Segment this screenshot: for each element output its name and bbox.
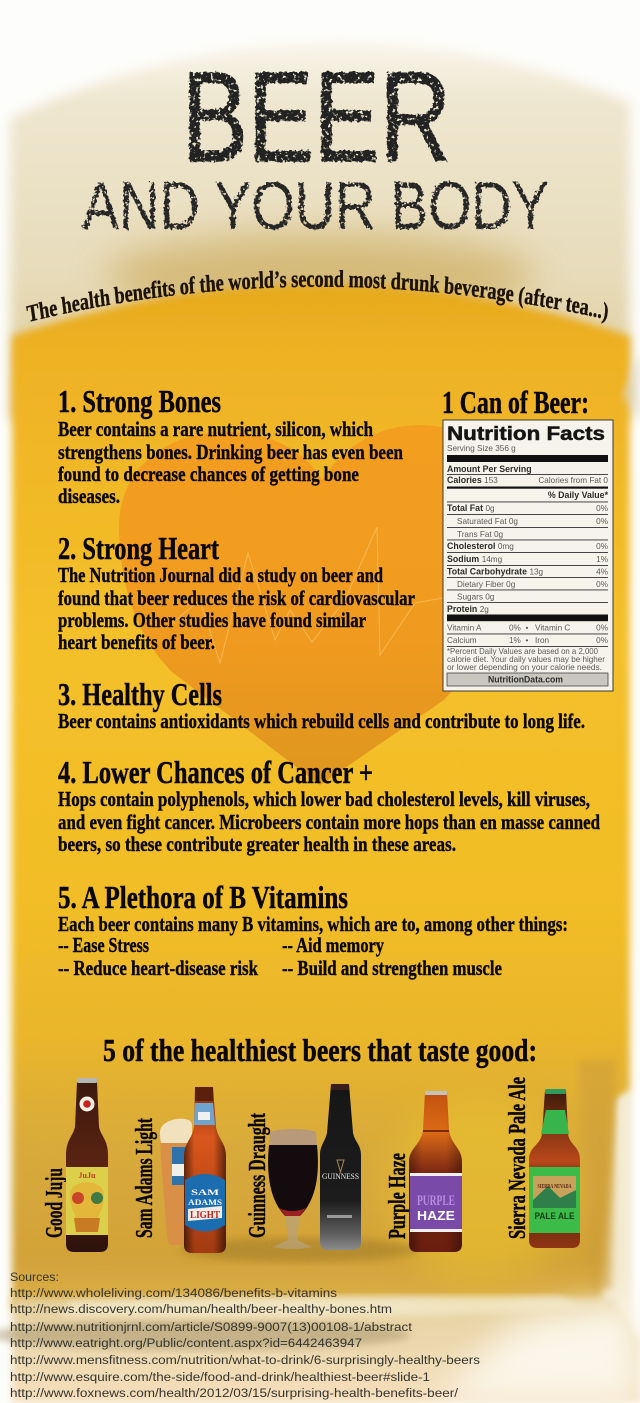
nutrition facts panel: 4%	[596, 568, 608, 576]
nutrition facts panel: 1%	[509, 636, 521, 645]
section 2: strong heart: The Nutrition Journal did a study on beer and	[58, 563, 383, 587]
title: And Your Body: AND YOUR BODY	[82, 168, 549, 244]
section 4: lower chances of cancer	[58, 754, 600, 856]
nutrition facts panel: Iron	[535, 636, 550, 645]
section 5: B vitamins: 5. A Plethora of B Vitamins	[58, 879, 348, 915]
nutrition facts panel: Total Carbohydrate 13g	[447, 566, 544, 576]
bottle: Purple Haze: PURPLE	[417, 1193, 455, 1209]
nutrition facts panel: *Percent Daily Values are based on a 2,000	[447, 647, 598, 656]
heart graphic	[119, 425, 521, 785]
foam head	[10, 42, 630, 420]
bottle label: Purple Haze: Purple Haze	[385, 1153, 411, 1239]
section 3: healthy cells: 3. Healthy Cells	[58, 676, 222, 712]
section 4: lower chances of cancer: 4. Lower Chances of Cancer +	[58, 754, 373, 790]
section 1: strong bones	[58, 383, 403, 508]
bottle: Sierra Nevada: PALE ALE	[534, 1211, 574, 1221]
sources: http://www.wholeliving.com/134086/benefits-b-vitamins	[10, 1286, 337, 1300]
bottle: Sierra Nevada: SIERRA NEVADA	[538, 1183, 572, 1190]
sources: http://news.discovery.com/human/health/beer-healthy-bones.htm	[10, 1302, 392, 1316]
heading: 5 healthiest beers: 5 of the healthiest beers that taste good:	[103, 1032, 537, 1068]
bottle: Purple Haze: HAZE	[417, 1208, 455, 1223]
right side foam strip	[600, 1092, 632, 1330]
bottle: Guinness	[320, 1084, 361, 1250]
nutrition facts panel: 0%	[596, 624, 608, 632]
section 5: B vitamins: -- Reduce heart-disease risk	[58, 956, 258, 980]
nutrition facts panel: •	[526, 624, 528, 632]
nutrition facts panel: or lower depending on your calorie needs.	[447, 663, 602, 672]
section 2: strong heart: 2. Strong Heart	[58, 530, 219, 566]
section 1: strong bones: 1. Strong Bones	[58, 383, 221, 419]
nutrition facts panel: Saturated Fat 0g	[457, 517, 518, 526]
nutrition facts panel: Amount Per Serving	[447, 464, 532, 474]
nutrition facts panel: Total Fat 0g	[447, 503, 495, 513]
sources: http://www.foxnews.com/health/2012/03/15/surprising-health-benefits-beer/	[10, 1386, 459, 1400]
section 1: strong bones: strengthens bones. Drinking beer has even been	[58, 440, 403, 464]
nutrition facts panel: 0%	[596, 517, 608, 526]
foam band across the bottom	[60, 1297, 590, 1318]
heading: 1 can of beer: 1 Can of Beer:	[442, 384, 589, 420]
grey shape at right edge	[622, 350, 640, 420]
section 1: strong bones: diseases.	[58, 484, 120, 508]
nutrition facts panel: 1%	[596, 555, 608, 564]
nutrition facts panel: 0%	[509, 624, 521, 632]
heartbeat line	[170, 527, 443, 663]
section 2: strong heart	[58, 530, 415, 654]
nutrition facts panel: 0%	[596, 504, 608, 513]
bottle: Sam Adams Light: LIGHT	[190, 1210, 220, 1221]
nutrition facts panel: Dietary Fiber 0g	[457, 580, 516, 589]
beer body	[12, 284, 630, 1310]
sources: http://www.nutritionjrnl.com/article/S0899-9007(13)00108-1/abstract	[10, 1320, 413, 1334]
glass: Guinness	[268, 1129, 318, 1249]
sources	[10, 1270, 480, 1400]
curved subtitle: The health benefits of the world’s second most drunk beverage (after tea...)	[26, 270, 608, 324]
section 1: strong bones: found to decrease chances of getting bone	[58, 462, 359, 486]
section 2: strong heart: problems. Other studies have found similar	[58, 608, 366, 632]
bottle: Guinness: GUINNESS	[322, 1172, 359, 1181]
title: Beer: BEER	[182, 46, 451, 189]
glass: Sam Adams	[160, 1119, 192, 1245]
section 5: B vitamins	[58, 879, 568, 980]
section 5: B vitamins: -- Ease Stress	[58, 933, 149, 957]
bottle: Purple Haze	[409, 1091, 462, 1252]
bottle label: Sam Adams Light: Sam Adams Light	[132, 1118, 158, 1238]
bottle label: Sierra Nevada Pale Ale: Sierra Nevada Pale Ale	[505, 1077, 531, 1239]
dark shade under the bottles	[180, 1238, 420, 1262]
beer texture	[193, 1096, 622, 1300]
bottle: Sierra Nevada	[529, 1089, 580, 1248]
section 4: lower chances of cancer: beers, so these contribute greater health in these areas.	[58, 832, 456, 856]
nutrition facts panel: Calcium	[447, 636, 477, 645]
nutrition facts panel: calorie diet. Your daily values may be higher	[447, 655, 605, 664]
nutrition facts panel: 0%	[596, 636, 608, 645]
nutrition facts panel: Protein 2g	[447, 604, 489, 614]
bottom foam	[12, 1298, 640, 1403]
nutrition facts panel: Nutrition Facts	[447, 424, 605, 445]
section 2: strong heart: heart benefits of beer.	[58, 630, 215, 654]
nutrition facts panel	[443, 420, 613, 691]
nutrition facts panel: Calories 153	[447, 475, 498, 485]
nutrition facts panel: 0%	[596, 542, 608, 551]
section 5: B vitamins: -- Build and strengthen muscle	[282, 956, 502, 980]
nutrition facts panel: Calories from Fat 0	[538, 476, 608, 485]
nutrition facts panel: Vitamin C	[535, 624, 570, 632]
sources: Sources:	[10, 1270, 59, 1284]
darker gold at right side	[578, 1060, 616, 1290]
section 2: strong heart: found that beer reduces the risk of cardiovascular	[58, 586, 415, 610]
nutrition facts panel: Trans Fat 0g	[457, 530, 504, 539]
section 1: strong bones: Beer contains a rare nutrient, silicon, which	[58, 417, 373, 441]
nutrition facts panel: % Daily Value*	[548, 490, 609, 500]
bottle: Sam Adams Light: ADAMS	[188, 1197, 222, 1207]
darker foam shading above the beer	[105, 233, 535, 317]
nutrition facts panel: NutritionData.com	[488, 674, 563, 684]
bottle: Sam Adams Light: SAM	[191, 1187, 219, 1197]
right bottom foam fade	[430, 1300, 640, 1403]
sources: http://www.mensfitness.com/nutrition/what-to-drink/6-surprisingly-healthy-beers	[10, 1353, 480, 1367]
bottle label: Guinness Draught: Guinness Draught	[245, 1113, 271, 1238]
bottle: Good Juju	[66, 1078, 108, 1252]
nutrition facts panel: •	[526, 636, 528, 645]
right yellow tint	[390, 1100, 570, 1280]
nutrition facts panel: Serving Size 356 g	[447, 444, 516, 453]
nutrition facts panel: Sodium 14mg	[447, 554, 503, 564]
sources: http://www.eatright.org/Public/content.aspx?id=6442463947	[10, 1336, 362, 1350]
tan streak behind the sources	[0, 1320, 410, 1350]
section 3: healthy cells	[58, 676, 585, 733]
bottle: Sam Adams Light	[184, 1087, 226, 1253]
sources: http://www.esquire.com/the-side/food-and-drink/healthiest-beer#slide-1	[10, 1370, 430, 1384]
bottle: Good Juju: JuJu	[79, 1171, 96, 1180]
nutrition facts panel: Cholesterol 0mg	[447, 541, 514, 551]
bottle label: Good Juju: Good Juju	[42, 1168, 68, 1238]
nutrition facts panel: Vitamin A	[447, 624, 482, 632]
nutrition facts panel: 0%	[596, 580, 608, 589]
nutrition facts panel: Sugars 0g	[457, 592, 495, 602]
section 5: B vitamins: -- Aid memory	[282, 933, 384, 957]
